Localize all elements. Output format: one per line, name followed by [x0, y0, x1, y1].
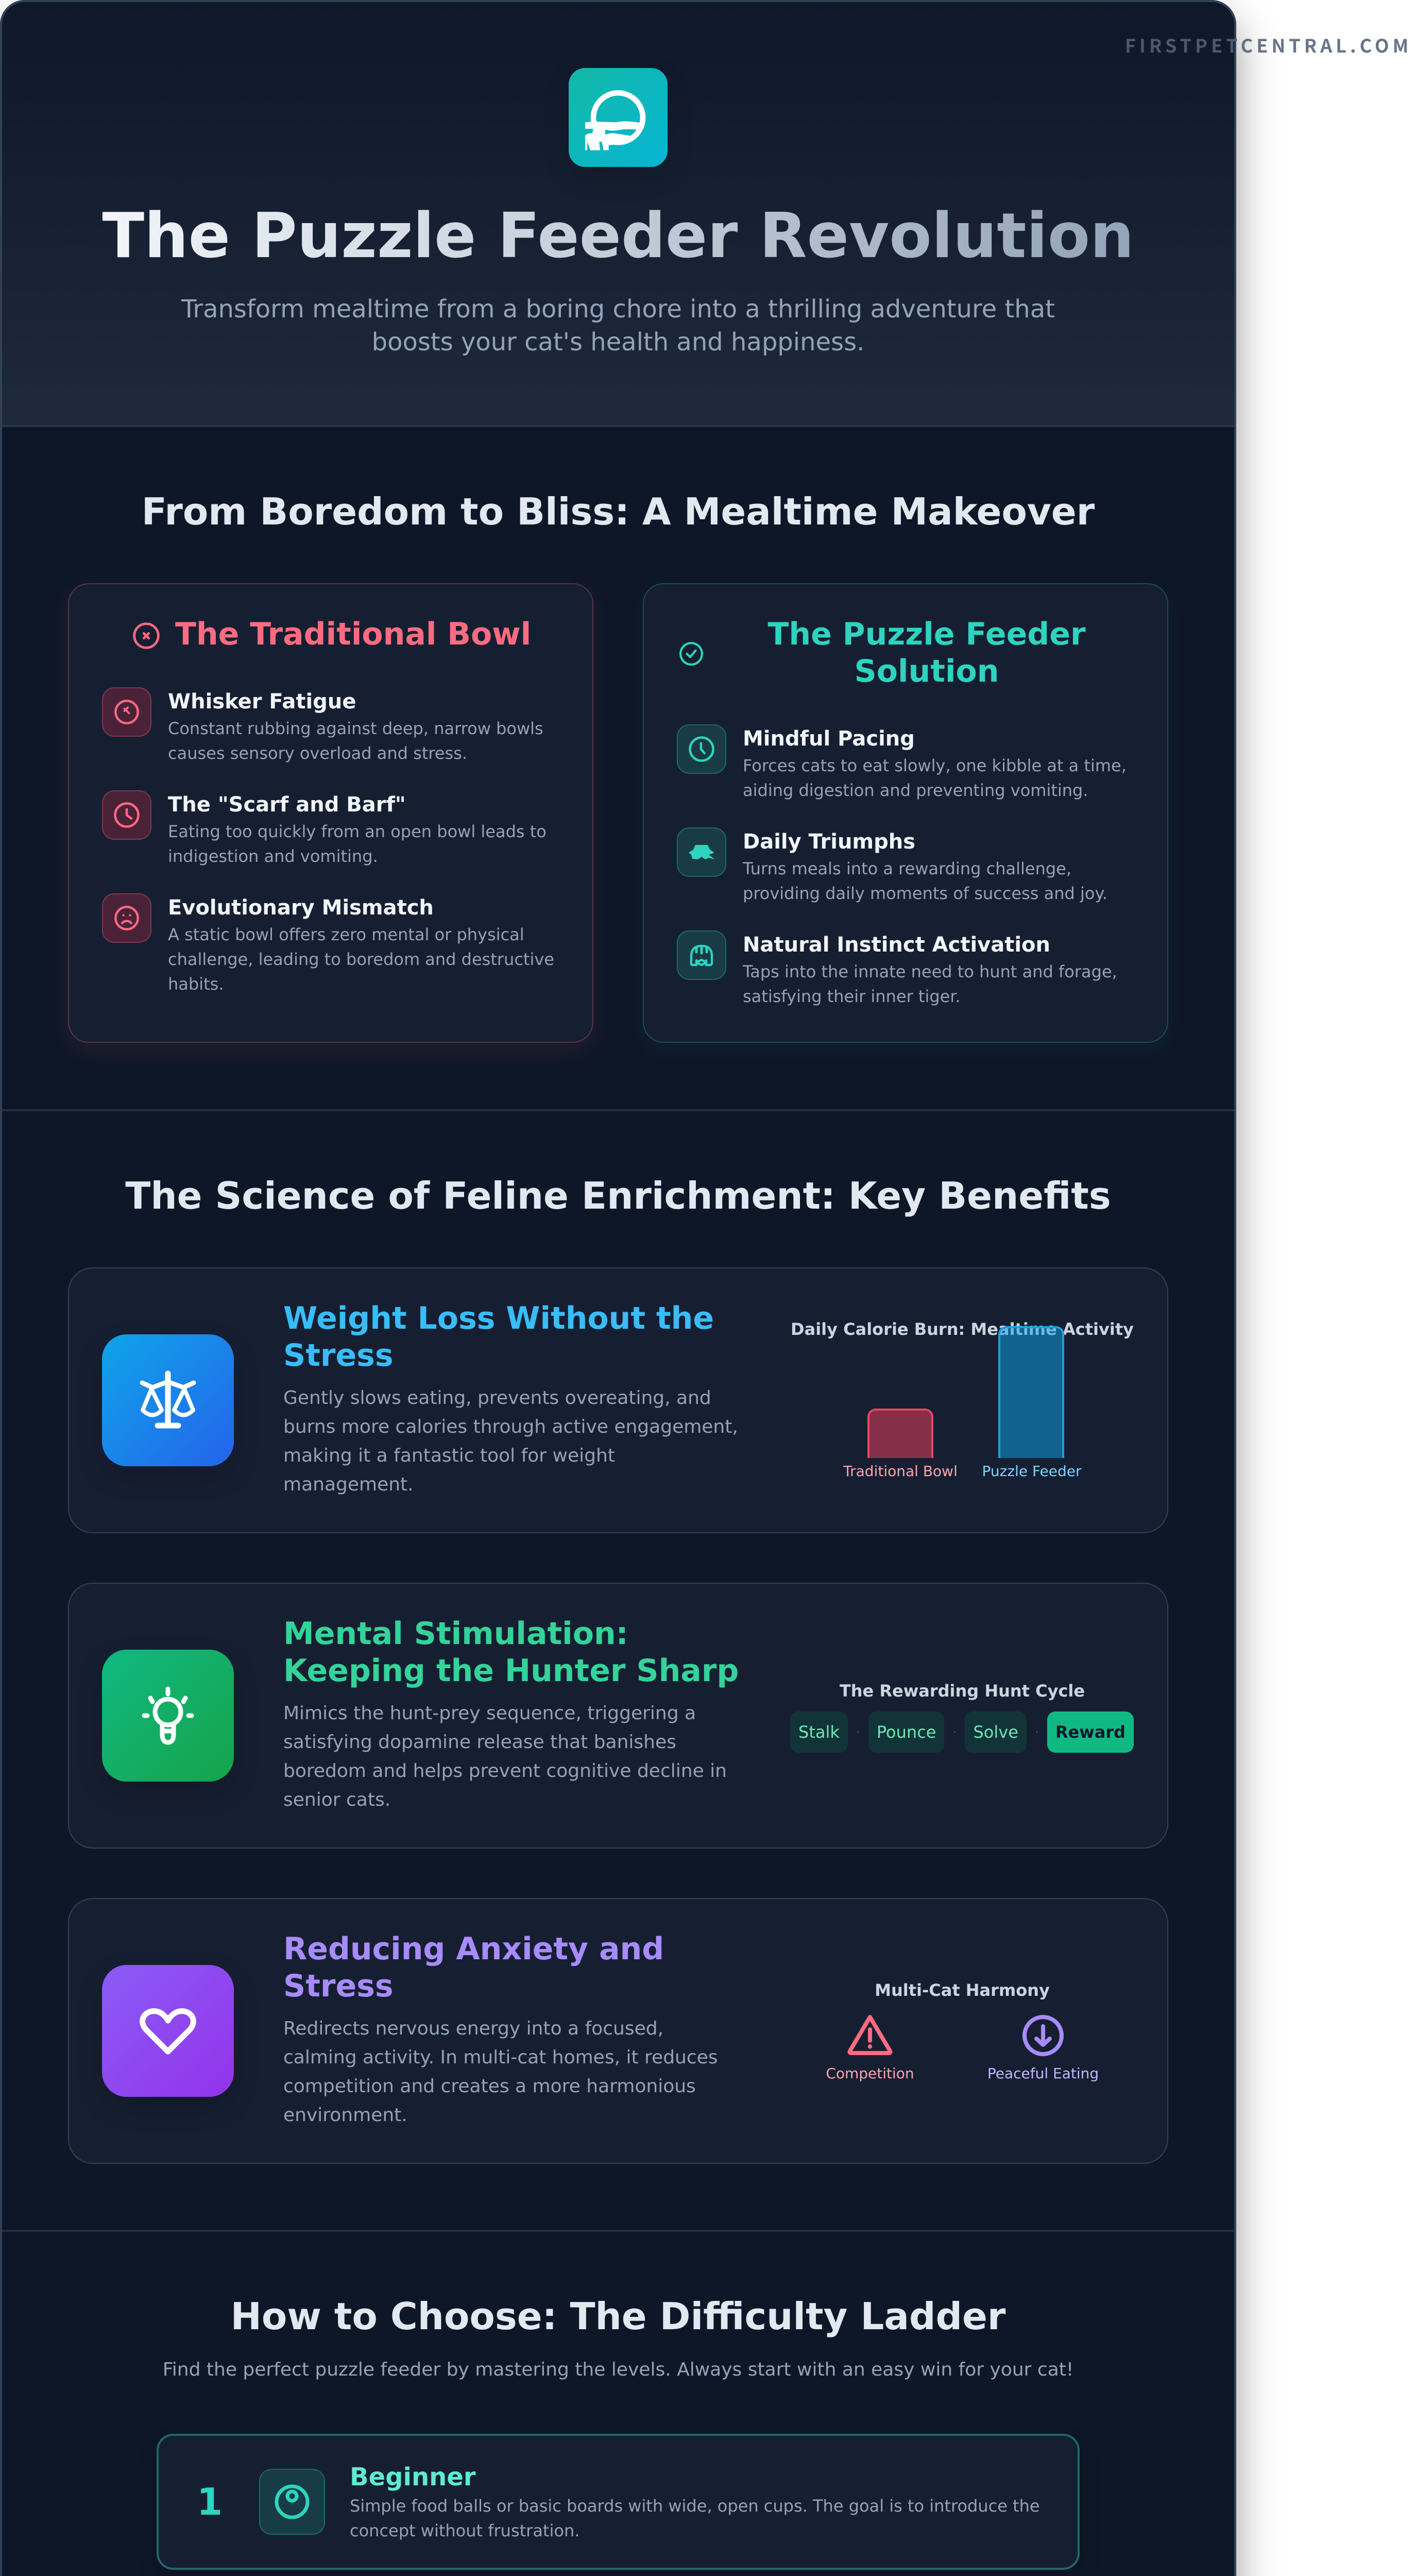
- text: reducing anxiety: environment.: [283, 2105, 407, 2126]
- text: mental stimulation: [283, 1617, 741, 1815]
- text: natural instinct activation: Taps into the innate need to hunt and forage,: [743, 962, 1117, 981]
- text: evolutionary mismatch: Evolutionary Mismatch: [168, 896, 434, 920]
- text: mental stimulation: Mimics the hunt-prey sequence, triggering a: [283, 1703, 696, 1724]
- bar: puzzle feeder: [998, 1326, 1064, 1458]
- icon: check circle: [679, 642, 703, 666]
- text: daily triumphs: [743, 830, 1107, 903]
- text: evolutionary mismatch: habits.: [168, 974, 224, 994]
- text: daily triumphs: Daily Triumphs: [743, 830, 915, 854]
- text: natural instinct activation: [743, 933, 1117, 1006]
- text: mindful pacing: [743, 727, 1127, 800]
- text: mental stimulation: satisfying dopamine release that banishes: [283, 1732, 676, 1753]
- text: mindful pacing: aiding digestion and preventing vomiting.: [743, 781, 1088, 800]
- text: whisker fatigue: causes sensory overload and stress.: [168, 743, 467, 763]
- text: weight loss: making it a fantastic tool for weight: [283, 1445, 615, 1466]
- text: reducing anxiety: Reducing Anxiety and: [283, 1931, 664, 1967]
- section heading: difficulty ladder: How to Choose: The Difficulty Ladder: [231, 2295, 1005, 2338]
- item: scarf and barf: [102, 790, 547, 866]
- text: weight loss: burns more calories through active engagement,: [283, 1416, 738, 1437]
- site label: FIRSTPETCENTRAL.COM: [1125, 31, 1412, 58]
- section heading: makeover: From Boredom to Bliss: A Mealtime Makeover: [142, 490, 1095, 533]
- section subtitle: Find the perfect puzzle feeder by mastering the levels. Always start with an easy win for your cat!: [163, 2359, 1073, 2380]
- panel: mental stimulation benefit: [68, 1583, 1168, 1849]
- heading: the puzzle feeder solution: [767, 616, 1086, 689]
- text: natural instinct activation: satisfying their inner tiger.: [743, 987, 961, 1006]
- chip: stalk: [790, 1711, 848, 1753]
- icon: target: [259, 2469, 325, 2535]
- text: beginner: Beginner: [350, 2463, 476, 2492]
- text: mental stimulation: boredom and helps prevent cognitive decline in: [283, 1760, 727, 1782]
- text: reducing anxiety: Redirects nervous energy into a focused,: [283, 2018, 663, 2039]
- step chips: ·: [953, 1725, 957, 1739]
- text: weight loss: [283, 1300, 738, 1495]
- label: competition: Competition: [826, 2065, 914, 2082]
- text: whisker fatigue: Constant rubbing against deep, narrow bowls: [168, 719, 543, 738]
- heading: the puzzle feeder solution: The Puzzle Feeder: [767, 616, 1086, 652]
- heading: the traditional bowl: The Traditional Bowl: [175, 616, 531, 652]
- text: natural instinct activation: Natural Instinct Activation: [743, 933, 1050, 957]
- text: beginner: [350, 2461, 1040, 2543]
- chip: solve: [965, 1711, 1027, 1753]
- icon: clock: [677, 724, 726, 774]
- panel: the traditional bowl: [68, 583, 593, 1043]
- item: daily triumphs: [677, 827, 1107, 903]
- text: weight loss: Weight Loss Without the: [283, 1300, 714, 1336]
- number 1: 1: [197, 2480, 223, 2523]
- text: reducing anxiety: competition and creates a more harmonious: [283, 2076, 696, 2097]
- icon: whisker: [102, 687, 151, 737]
- text: mindful pacing: Mindful Pacing: [743, 727, 915, 751]
- icon: x circle: [133, 622, 160, 649]
- chip: reward: [1047, 1711, 1134, 1753]
- text: scarf and barf: The "Scarf and Barf": [168, 793, 406, 817]
- chart title: Daily Calorie Burn: Mealtime Activity: [791, 1319, 1134, 1339]
- item: natural instinct activation: [677, 930, 1117, 1006]
- label: traditional bowl: Traditional Bowl: [843, 1463, 958, 1480]
- label: peaceful eating: Peaceful Eating: [987, 2065, 1099, 2082]
- icon: scales: [102, 1334, 234, 1466]
- chart title: The Rewarding Hunt Cycle: [840, 1681, 1085, 1701]
- text: evolutionary mismatch: [168, 896, 554, 994]
- icon: light bulb: [102, 1650, 234, 1782]
- bar: traditional bowl: [867, 1409, 933, 1458]
- heading: the puzzle feeder solution: Solution: [855, 653, 999, 689]
- text: evolutionary mismatch: challenge, leading to boredom and destructive: [168, 950, 554, 969]
- text: scarf and barf: [168, 793, 547, 866]
- text: scarf and barf: indigestion and vomiting.: [168, 846, 378, 866]
- icon: sad face: [102, 893, 151, 943]
- text: reducing anxiety: Stress: [283, 1968, 394, 2004]
- chip: solve: Solve: [973, 1722, 1018, 1742]
- subtitle: Transform mealtime from a boring chore into a thrilling adventure that: [181, 295, 1055, 324]
- text: reducing anxiety: [283, 1932, 741, 2130]
- icon: heart: [102, 1965, 234, 2097]
- chip: stalk: Stalk: [798, 1722, 840, 1742]
- flow chart: rewarding hunt cycle: [790, 1679, 1134, 1753]
- text: mental stimulation: Mental Stimulation:: [283, 1616, 628, 1652]
- panel: step 1 beginner: [157, 2434, 1080, 2570]
- text: weight loss: Stress: [283, 1337, 394, 1374]
- step chips: ·: [1035, 1725, 1039, 1739]
- item: whisker fatigue: [102, 687, 543, 763]
- item: evolutionary mismatch: [102, 893, 554, 994]
- label: puzzle feeder: Puzzle Feeder: [982, 1463, 1081, 1480]
- text: scarf and barf: Eating too quickly from an open bowl leads to: [168, 822, 547, 841]
- icon: clock: [102, 790, 151, 840]
- title: The Puzzle Feeder Revolution: [102, 200, 1134, 272]
- subtitle: boosts your cat's health and happiness.: [372, 328, 864, 357]
- comparison: multi-cat harmony: [790, 1978, 1134, 2084]
- text: daily triumphs: Turns meals into a rewarding challenge,: [743, 859, 1071, 878]
- panel: weight loss benefit: [68, 1267, 1168, 1533]
- text: daily triumphs: providing daily moments of success and joy.: [743, 884, 1107, 903]
- icon: cat arch: [677, 930, 726, 980]
- chart title: Multi-Cat Harmony: [875, 1980, 1050, 2000]
- bar chart: daily calorie burn: [791, 1319, 1134, 1480]
- text: weight loss: Gently slows eating, prevents overeating, and: [283, 1387, 711, 1409]
- panel: reducing anxiety benefit: [68, 1898, 1168, 2164]
- text: beginner: concept without frustration.: [350, 2521, 579, 2540]
- icon: puzzle feeder logo: [569, 68, 668, 167]
- icon: trophy blob: [677, 827, 726, 877]
- section heading: key benefits: The Science of Feline Enrichment: Key Benefits: [125, 1174, 1111, 1217]
- panel: the puzzle feeder solution: [643, 583, 1168, 1043]
- header panel: [0, 0, 1236, 427]
- text: whisker fatigue: Whisker Fatigue: [168, 690, 356, 714]
- text: beginner: Simple food balls or basic boards with wide, open cups. The goal is to introduce the: [350, 2496, 1040, 2516]
- chip: pounce: Pounce: [877, 1722, 936, 1742]
- text: mental stimulation: Keeping the Hunter Sharp: [283, 1653, 739, 1689]
- item: mindful pacing: [677, 724, 1127, 800]
- chip: pounce: [868, 1711, 944, 1753]
- text: weight loss: management.: [283, 1474, 414, 1495]
- icon: warning triangle: [845, 2011, 895, 2060]
- subtitle: [181, 295, 1055, 357]
- icon: arrow circle: [1018, 2011, 1068, 2060]
- text: mental stimulation: senior cats.: [283, 1789, 390, 1810]
- text: evolutionary mismatch: A static bowl offers zero mental or physical: [168, 925, 524, 944]
- chip: reward: Reward: [1055, 1722, 1125, 1742]
- text: reducing anxiety: calming activity. In multi-cat homes, it reduces: [283, 2047, 718, 2068]
- text: whisker fatigue: [168, 690, 543, 763]
- step chips: ·: [856, 1725, 860, 1739]
- text: mindful pacing: Forces cats to eat slowly, one kibble at a time,: [743, 756, 1127, 775]
- step chips: [790, 1711, 1134, 1753]
